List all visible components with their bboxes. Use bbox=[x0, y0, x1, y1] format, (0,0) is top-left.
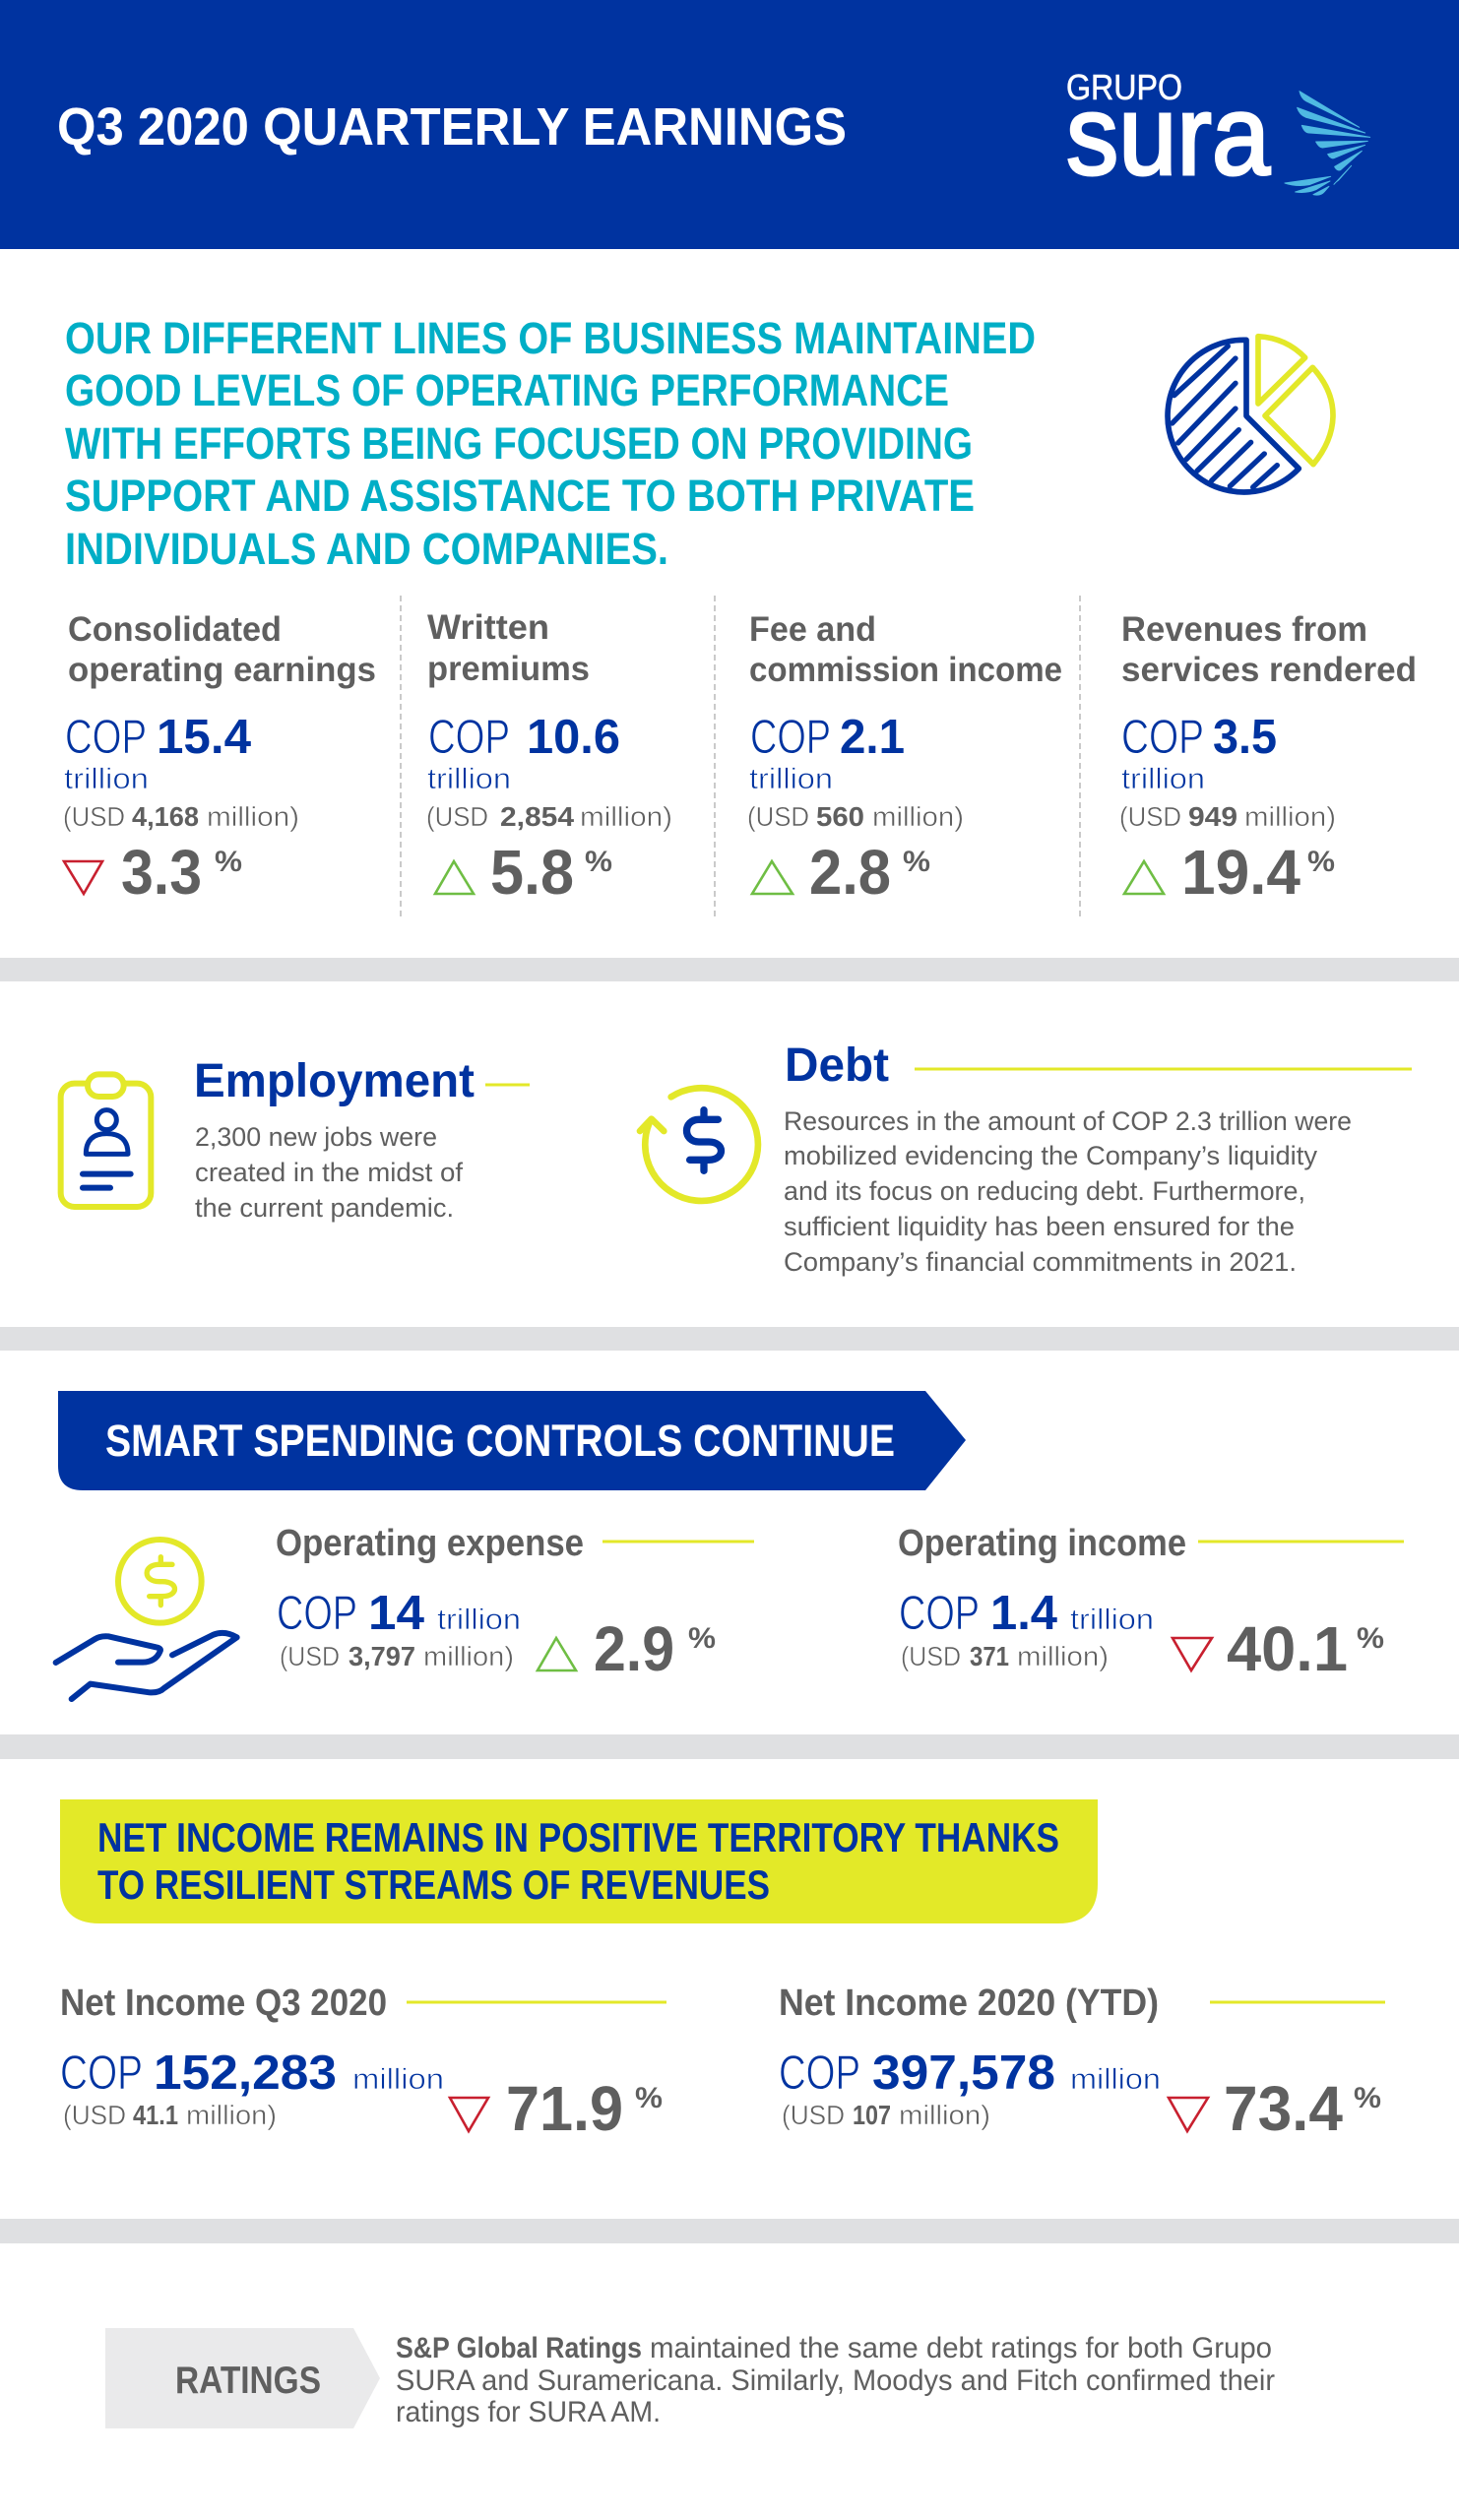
panel: operating income: COP bbox=[899, 1587, 980, 1640]
lead statement: OUR DIFFERENT LINES OF BUSINESS MAINTAINED bbox=[65, 313, 1036, 363]
panel: fee and commission income: 2.8 bbox=[809, 837, 891, 908]
panel: revenues from services rendered: (USD bbox=[1119, 801, 1181, 832]
panel: fee and commission income: COP bbox=[750, 711, 831, 764]
ratings text bbox=[396, 2332, 1275, 2428]
panel: consolidated operating earnings: 3.3 bbox=[121, 837, 202, 908]
panel: operating expense bbox=[276, 1523, 754, 1684]
panel: net income Q3 2020: Net Income Q3 2020 bbox=[60, 1983, 387, 2024]
panel: written premiums: trillion bbox=[427, 763, 511, 795]
icon: pie chart bbox=[1168, 337, 1333, 492]
icon: clipboard with person bbox=[61, 1074, 151, 1207]
panel: consolidated operating earnings: (USD bbox=[63, 801, 125, 832]
employment text: the current pandemic. bbox=[195, 1193, 454, 1223]
heading: debt: Debt bbox=[785, 1040, 889, 1092]
panel: consolidated operating earnings: trillion bbox=[64, 763, 149, 795]
banner: net income: TO RESILIENT STREAMS OF REVENUES bbox=[97, 1861, 770, 1908]
title: Q3 2020 QUARTERLY EARNINGS bbox=[57, 97, 847, 157]
panel: revenues from services rendered: Revenues from bbox=[1121, 610, 1367, 649]
panel: revenues from services rendered bbox=[1119, 610, 1417, 908]
panel: operating expense: (USD bbox=[280, 1641, 340, 1671]
panel: net income 2020 YTD: 73.4 bbox=[1224, 2073, 1343, 2144]
panel: written premiums: 5.8 bbox=[490, 837, 574, 908]
panel: fee and commission income: Fee and bbox=[749, 610, 876, 649]
panel: operating expense: COP bbox=[277, 1587, 357, 1640]
panel: revenues from services rendered: 3.5 bbox=[1213, 711, 1277, 764]
panel: operating income: (USD bbox=[901, 1641, 961, 1671]
panel: net income 2020 YTD: Net Income 2020 (YTD) bbox=[779, 1983, 1159, 2024]
panel: operating expense: million) bbox=[423, 1641, 514, 1671]
lead statement: INDIVIDUALS AND COMPANIES. bbox=[65, 524, 668, 574]
lead statement: GOOD LEVELS OF OPERATING PERFORMANCE bbox=[65, 365, 949, 415]
panel: operating income: % bbox=[1357, 1622, 1384, 1655]
panel: consolidated operating earnings: COP bbox=[65, 711, 147, 764]
banner: smart spending controls: SMART SPENDING CONTROLS CONTINUE bbox=[105, 1416, 895, 1466]
panel: written premiums: 10.6 bbox=[527, 711, 620, 764]
panel: consolidated operating earnings bbox=[63, 610, 376, 908]
ratings text: S&P Global Ratings bbox=[396, 2332, 642, 2364]
panel: consolidated operating earnings: operating earnings bbox=[68, 651, 376, 689]
panel: net income 2020 YTD: 107 bbox=[853, 2100, 891, 2130]
panel: fee and commission income: trillion bbox=[749, 763, 833, 795]
panel: revenues from services rendered: services rendered bbox=[1121, 651, 1417, 689]
panel: net income Q3 2020: (USD bbox=[63, 2100, 126, 2130]
panel: written premiums: (USD bbox=[426, 801, 488, 832]
panel: written premiums: premiums bbox=[427, 650, 590, 688]
panel: operating expense: % bbox=[688, 1622, 716, 1655]
lead statement bbox=[65, 313, 1036, 574]
panel: net income Q3 2020: COP bbox=[60, 2047, 143, 2100]
employment text bbox=[195, 1122, 464, 1223]
panel: net income Q3 2020: % bbox=[635, 2082, 663, 2114]
panel: fee and commission income: (USD bbox=[747, 801, 809, 832]
panel: fee and commission income: commission income bbox=[749, 651, 1062, 689]
panel: net income Q3 2020: 41.1 bbox=[133, 2100, 178, 2130]
debt text bbox=[784, 1106, 1352, 1277]
panel: fee and commission income: % bbox=[903, 846, 930, 878]
panel: net income Q3 2020: million) bbox=[186, 2100, 277, 2130]
ratings text: SURA and Suramericana. Similarly, Moodys and Fitch confirmed their bbox=[396, 2364, 1275, 2397]
logo: Grupo Sura bbox=[1066, 67, 1370, 199]
panel: operating income: 40.1 bbox=[1227, 1613, 1348, 1684]
panel: net income 2020 YTD bbox=[779, 1983, 1385, 2144]
panel: net income 2020 YTD: million) bbox=[899, 2100, 990, 2130]
heading: employment: Employment bbox=[194, 1055, 475, 1107]
panel: written premiums: 2,854 bbox=[500, 801, 574, 832]
panel: operating expense: 3,797 bbox=[349, 1641, 415, 1671]
panel: consolidated operating earnings: Consolidated bbox=[68, 610, 282, 649]
panel: revenues from services rendered: trillion bbox=[1121, 763, 1205, 795]
panel: net income Q3 2020 bbox=[60, 1983, 666, 2144]
debt text: Resources in the amount of COP 2.3 trillion were bbox=[784, 1106, 1352, 1136]
panel: consolidated operating earnings: 4,168 bbox=[132, 801, 199, 832]
panel: revenues from services rendered: 949 bbox=[1188, 801, 1237, 832]
panel: operating income: 1.4 bbox=[990, 1587, 1057, 1640]
tag: ratings: RATINGS bbox=[175, 2360, 321, 2402]
panel: operating income: million) bbox=[1017, 1641, 1109, 1671]
ratings text: maintained the same debt ratings for both Grupo bbox=[650, 2332, 1272, 2364]
panel: net income Q3 2020: 71.9 bbox=[506, 2073, 623, 2144]
panel: revenues from services rendered: 19.4 bbox=[1181, 837, 1300, 908]
panel: operating income: Operating income bbox=[898, 1523, 1186, 1564]
panel: net income 2020 YTD: 397,578 bbox=[872, 2047, 1055, 2100]
debt text: and its focus on reducing debt. Furthermore, bbox=[784, 1176, 1305, 1206]
panel: revenues from services rendered: % bbox=[1307, 846, 1335, 878]
panel: operating expense: 2.9 bbox=[594, 1613, 674, 1684]
panel: written premiums: COP bbox=[428, 711, 510, 764]
panel: operating expense: 14 bbox=[368, 1587, 424, 1640]
panel: written premiums: million) bbox=[580, 801, 672, 832]
panel: net income 2020 YTD: (USD bbox=[782, 2100, 845, 2130]
ratings text: ratings for SURA AM. bbox=[396, 2396, 661, 2428]
panel: written premiums: % bbox=[585, 846, 612, 878]
icon: dollar with cycle arrow bbox=[640, 1088, 758, 1201]
panel: operating income bbox=[898, 1523, 1404, 1684]
header banner bbox=[0, 0, 1459, 249]
panel: net income Q3 2020: 152,283 bbox=[154, 2047, 337, 2100]
banner: smart spending controls bbox=[58, 1391, 966, 1490]
panel: consolidated operating earnings: million) bbox=[207, 801, 299, 832]
panel: operating expense: Operating expense bbox=[276, 1523, 584, 1564]
debt text: Company’s financial commitments in 2021. bbox=[784, 1247, 1297, 1277]
panel: net income 2020 YTD: % bbox=[1354, 2082, 1381, 2114]
panel: revenues from services rendered: COP bbox=[1121, 711, 1204, 764]
panel: net income Q3 2020: million bbox=[352, 2063, 444, 2096]
logo: Grupo Sura: sura bbox=[1066, 73, 1270, 199]
banner: net income: NET INCOME REMAINS IN POSITIVE TERRITORY THANKS bbox=[97, 1814, 1059, 1860]
debt text: sufficient liquidity has been ensured for the bbox=[784, 1212, 1295, 1241]
banner: net income bbox=[60, 1799, 1098, 1923]
panel: operating income: trillion bbox=[1070, 1604, 1154, 1636]
panel: debt bbox=[640, 1040, 1412, 1277]
panel: consolidated operating earnings: % bbox=[215, 846, 242, 878]
panel: fee and commission income: million) bbox=[872, 801, 964, 832]
panel: operating expense: trillion bbox=[437, 1604, 521, 1636]
logo: Grupo Sura: GRUPO bbox=[1066, 67, 1182, 107]
panel: net income 2020 YTD: COP bbox=[779, 2047, 860, 2100]
panel: fee and commission income: 560 bbox=[816, 801, 864, 832]
tag: ratings bbox=[105, 2328, 380, 2428]
employment text: 2,300 new jobs were bbox=[195, 1122, 437, 1152]
panel: written premiums: Written bbox=[427, 608, 549, 647]
panel: consolidated operating earnings: 15.4 bbox=[157, 711, 251, 764]
panel: written premiums bbox=[426, 608, 672, 908]
debt text: mobilized evidencing the Company’s liquidity bbox=[784, 1141, 1318, 1170]
employment text: created in the midst of bbox=[195, 1158, 464, 1187]
lead statement: SUPPORT AND ASSISTANCE TO BOTH PRIVATE bbox=[65, 471, 975, 521]
panel: operating income: 371 bbox=[970, 1641, 1009, 1671]
panel: fee and commission income: 2.1 bbox=[840, 711, 905, 764]
panel: fee and commission income bbox=[747, 610, 1062, 908]
panel: revenues from services rendered: million) bbox=[1244, 801, 1336, 832]
icon: hand holding coin bbox=[56, 1540, 237, 1699]
panel: net income 2020 YTD: million bbox=[1070, 2063, 1161, 2096]
panel: employment bbox=[61, 1055, 530, 1223]
lead statement: WITH EFFORTS BEING FOCUSED ON PROVIDING bbox=[65, 418, 973, 469]
column dividers bbox=[401, 596, 1080, 918]
